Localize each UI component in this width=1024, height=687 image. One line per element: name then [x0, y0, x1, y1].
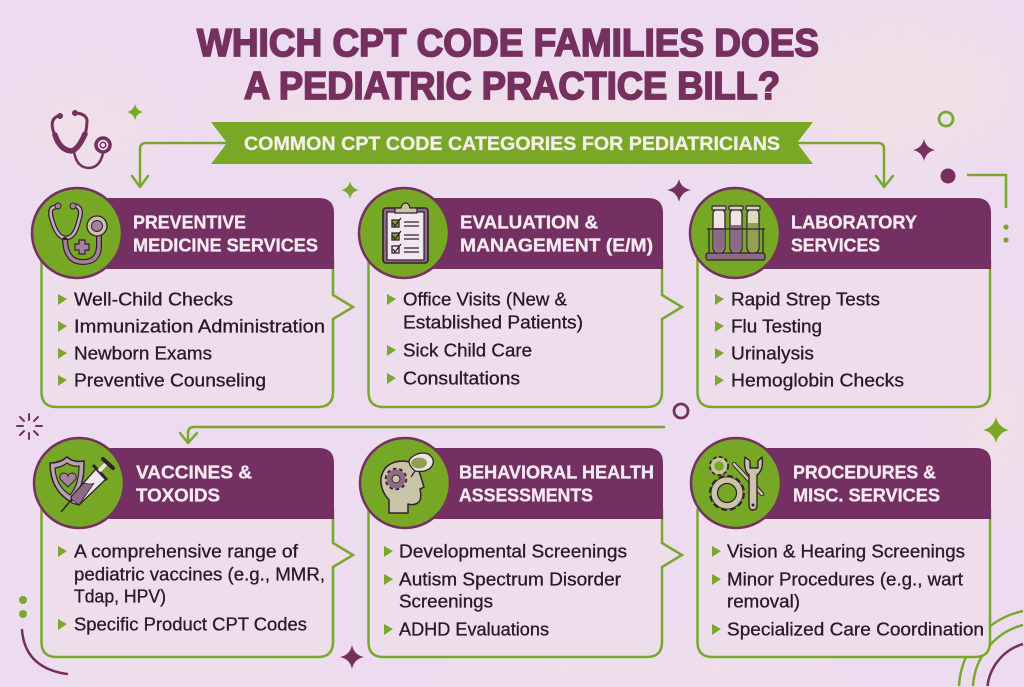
header text: MISC. SERVICES — [793, 486, 940, 506]
icon: stethoscope decoration — [52, 110, 110, 168]
header text — [793, 462, 940, 506]
bullet list — [712, 542, 984, 640]
bullet list — [58, 290, 325, 390]
bullet list: Well-Child Checks — [74, 290, 233, 310]
header text — [459, 462, 654, 506]
bullet list: Immunization Administration — [74, 316, 325, 336]
card outline — [368, 260, 682, 407]
bullet list: Screenings — [399, 592, 493, 612]
bullet list: removal) — [727, 592, 800, 612]
bullet list: Preventive Counseling — [74, 370, 266, 390]
icon badge: shield and syringe — [34, 438, 124, 528]
header text: PREVENTIVE — [133, 212, 246, 232]
title: A PEDIATRIC PRACTICE BILL? — [244, 65, 780, 108]
header text: VACCINES & — [136, 462, 252, 482]
panel: procedures and misc services — [691, 438, 991, 657]
header text: LABORATORY — [791, 212, 917, 232]
panel: behavioral health assessments — [360, 438, 682, 657]
bullet list: Specialized Care Coordination — [727, 620, 984, 640]
card outline — [42, 510, 353, 657]
header band — [70, 198, 334, 269]
panel: laboratory services — [690, 188, 991, 407]
header text — [133, 212, 318, 256]
bullet list — [58, 542, 325, 634]
arrow: first row to second row — [180, 427, 664, 443]
bullet list: ADHD Evaluations — [399, 620, 549, 640]
panel: preventive medicine services — [32, 188, 353, 407]
header text: PROCEDURES & — [793, 462, 936, 482]
banner: common CPT code categories: COMMON CPT CODE CATEGORIES FOR PEDIATRICIANS — [244, 134, 780, 155]
bullet list: Vision & Hearing Screenings — [727, 542, 965, 562]
bullet list: Urinalysis — [731, 344, 814, 364]
icon badge: clipboard checklist — [359, 188, 449, 278]
bullet list: Hemoglobin Checks — [731, 370, 904, 390]
panel: vaccines and toxoids — [34, 438, 353, 657]
bullet list: Sick Child Care — [403, 340, 532, 360]
header band — [400, 198, 663, 269]
header text: SERVICES — [791, 236, 880, 256]
arrow: banner to third card — [797, 143, 893, 187]
bullet list: Newborn Exams — [74, 344, 212, 364]
bullet list: pediatric vaccines (e.g., MMR, — [74, 564, 325, 584]
title — [197, 22, 819, 108]
title: WHICH CPT CODE FAMILIES DOES — [197, 22, 819, 65]
bullet list: Office Visits (New & — [403, 290, 567, 310]
bullet list: Tdap, HPV) — [74, 586, 166, 606]
icon badge: gears and wrench — [691, 438, 781, 528]
bullet list: Autism Spectrum Disorder — [399, 570, 621, 590]
bullet list — [387, 290, 583, 388]
bullet list — [715, 290, 904, 390]
header band — [70, 448, 334, 519]
header text — [460, 212, 653, 256]
bullet list: Developmental Screenings — [399, 542, 627, 562]
header text: TOXOIDS — [136, 486, 220, 506]
bullet list: Established Patients) — [403, 312, 583, 332]
header text: ASSESSMENTS — [459, 486, 593, 506]
icon badge: head with gear and speech bubble — [360, 438, 450, 528]
header text — [136, 462, 252, 506]
bullet list: Flu Testing — [731, 316, 822, 336]
header text — [791, 212, 917, 256]
card outline — [698, 260, 990, 407]
header text: MEDICINE SERVICES — [133, 236, 318, 256]
bullet list: A comprehensive range of — [74, 542, 299, 562]
icon badge: test tubes — [690, 188, 780, 278]
bullet list: Consultations — [403, 368, 520, 388]
card outline — [368, 510, 682, 657]
card outline — [698, 510, 990, 657]
bullet list — [384, 542, 627, 640]
banner: common CPT code categories — [211, 122, 813, 164]
bullet list: Specific Product CPT Codes — [74, 614, 307, 634]
header band — [400, 448, 663, 519]
header text: MANAGEMENT (E/M) — [460, 236, 653, 256]
icon badge: stethoscope with cross — [32, 188, 122, 278]
header text: EVALUATION & — [460, 212, 598, 232]
header band — [730, 198, 991, 269]
header text: BEHAVIORAL HEALTH — [459, 462, 654, 482]
bullet list: Minor Procedures (e.g., wart — [727, 570, 963, 590]
bullet list: Rapid Strep Tests — [731, 290, 880, 310]
arrow: banner to first card — [132, 143, 227, 187]
card outline — [42, 260, 353, 407]
panel: evaluation and management — [359, 188, 682, 407]
header band — [730, 448, 991, 519]
